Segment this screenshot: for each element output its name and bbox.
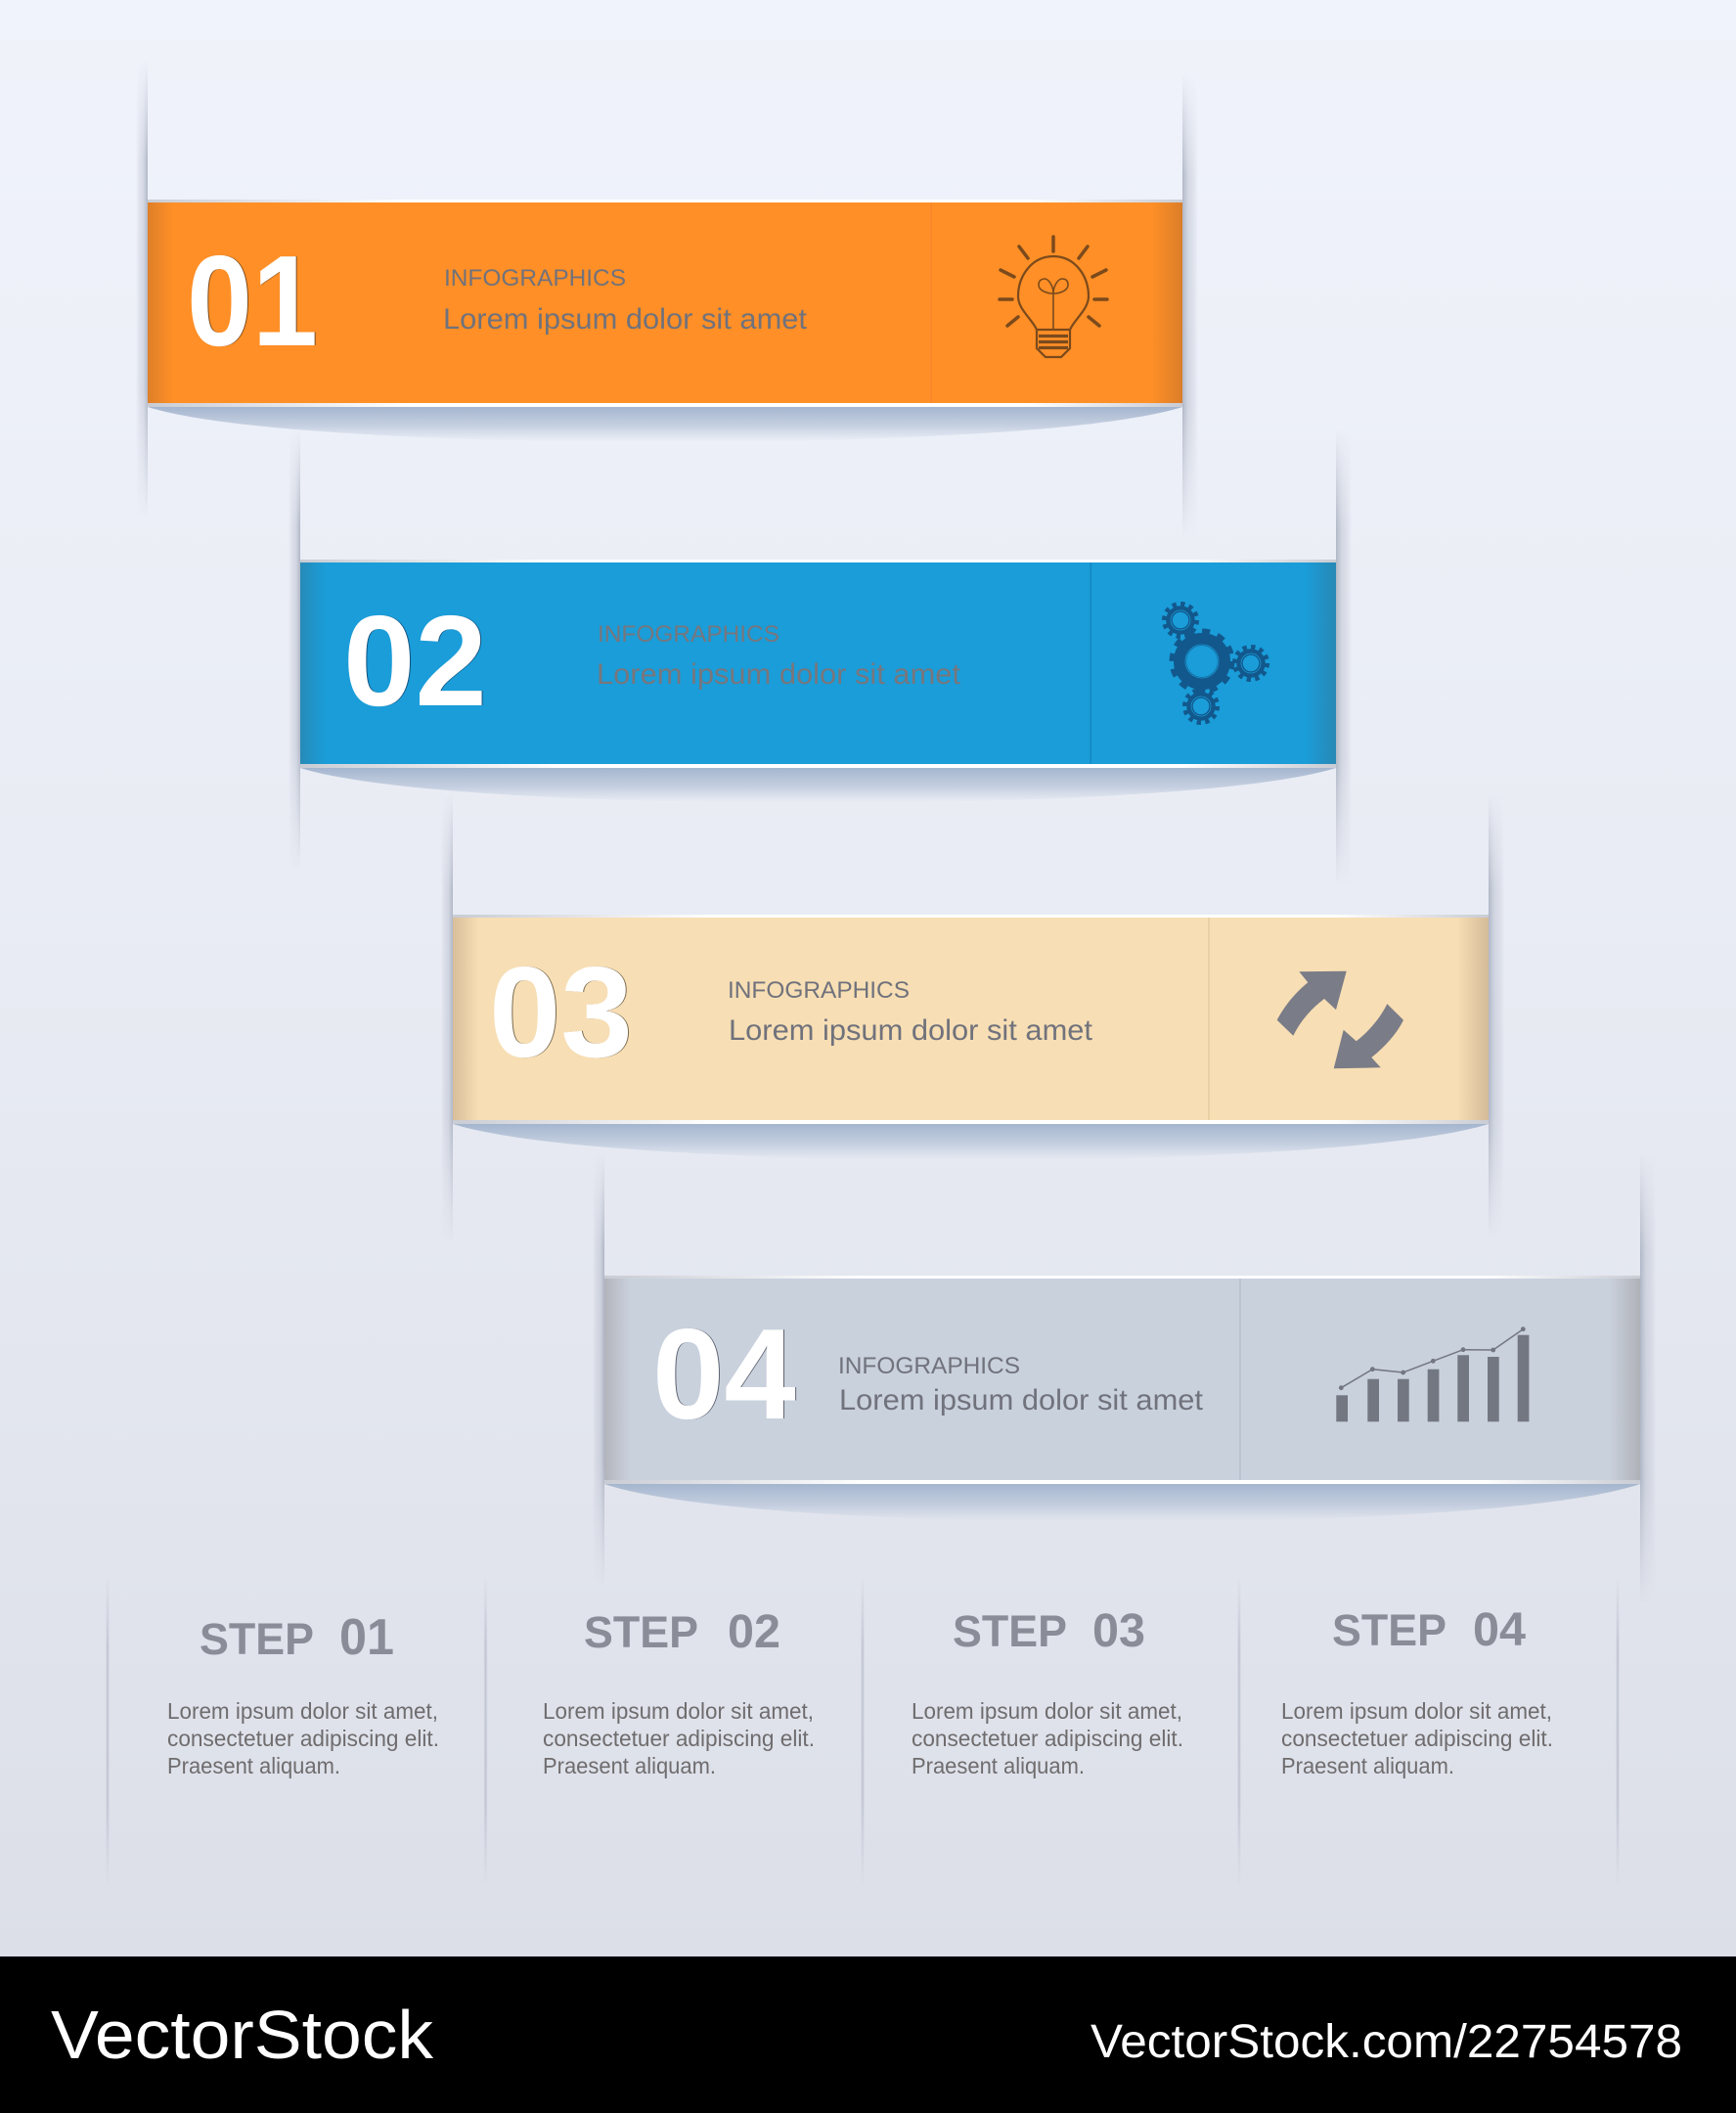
- body text: [167, 1698, 439, 1778]
- body text: Praesent aliquam.: [912, 1753, 1085, 1778]
- body text: Lorem ipsum dolor sit amet,: [1281, 1698, 1552, 1724]
- text: lorem ipsum: Lorem ipsum dolor sit amet: [443, 303, 808, 336]
- panel: step 01 orange ribbon: [148, 200, 1182, 407]
- panel: step 03 cream ribbon: [453, 915, 1489, 1124]
- text: lorem ipsum: Lorem ipsum dolor sit amet: [597, 658, 961, 691]
- column: step 02 description: [543, 1606, 815, 1778]
- panel: step 04 slate ribbon: [604, 1276, 1640, 1484]
- footer logo text: VectorStock: [51, 1997, 434, 2073]
- column: step 04 description: [1281, 1604, 1553, 1778]
- column: step 01 description: [167, 1609, 439, 1778]
- label: INFOGRAPHICS: INFOGRAPHICS: [728, 977, 910, 1004]
- body text: Praesent aliquam.: [167, 1753, 340, 1778]
- heading: STEP 03: 03: [1092, 1605, 1145, 1657]
- body text: consectetuer adipiscing elit.: [912, 1726, 1183, 1751]
- heading: STEP 02: 02: [728, 1606, 780, 1658]
- body text: Praesent aliquam.: [1281, 1753, 1454, 1778]
- body text: Lorem ipsum dolor sit amet,: [167, 1698, 438, 1724]
- label: INFOGRAPHICS: INFOGRAPHICS: [444, 265, 626, 292]
- label: INFOGRAPHICS: INFOGRAPHICS: [838, 1353, 1020, 1379]
- number 01: 01: [187, 229, 318, 373]
- body text: Lorem ipsum dolor sit amet,: [912, 1698, 1182, 1724]
- footer: watermark bar: [0, 1956, 1736, 2113]
- heading: STEP 01: 01: [339, 1609, 394, 1666]
- text: lorem ipsum: Lorem ipsum dolor sit amet: [729, 1014, 1093, 1047]
- icon: gears: [1164, 605, 1268, 722]
- heading: STEP 01: STEP: [200, 1614, 314, 1664]
- body text: [912, 1698, 1183, 1778]
- heading: STEP 04: STEP: [1332, 1605, 1447, 1655]
- number 03: 03: [489, 940, 633, 1084]
- number 02: 02: [343, 589, 487, 733]
- body text: consectetuer adipiscing elit.: [1281, 1726, 1553, 1751]
- heading: STEP 03: [953, 1605, 1145, 1657]
- heading: STEP 02: STEP: [584, 1607, 698, 1657]
- footer url text: VectorStock.com/22754578: [1091, 2016, 1682, 2068]
- body text: Praesent aliquam.: [543, 1753, 716, 1778]
- heading: STEP 04: [1332, 1604, 1526, 1656]
- body text: consectetuer adipiscing elit.: [543, 1726, 815, 1751]
- icon: cycle arrows: [1277, 971, 1403, 1068]
- body text: [1281, 1698, 1553, 1778]
- heading: STEP 02: [584, 1606, 780, 1658]
- icon: light bulb: [1000, 237, 1107, 357]
- text: lorem ipsum: Lorem ipsum dolor sit amet: [839, 1384, 1204, 1416]
- label: INFOGRAPHICS: INFOGRAPHICS: [598, 621, 779, 648]
- icon: bar and line chart: [1336, 1326, 1529, 1421]
- body text: consectetuer adipiscing elit.: [167, 1726, 439, 1751]
- heading: STEP 01: [200, 1609, 394, 1666]
- body text: [543, 1698, 815, 1778]
- number 04: 04: [652, 1302, 796, 1446]
- heading: STEP 03: STEP: [953, 1606, 1067, 1656]
- panel: step 02 blue ribbon: [300, 560, 1336, 768]
- heading: STEP 04: 04: [1473, 1604, 1526, 1656]
- column: step 03 description: [912, 1605, 1183, 1778]
- body text: Lorem ipsum dolor sit amet,: [543, 1698, 814, 1724]
